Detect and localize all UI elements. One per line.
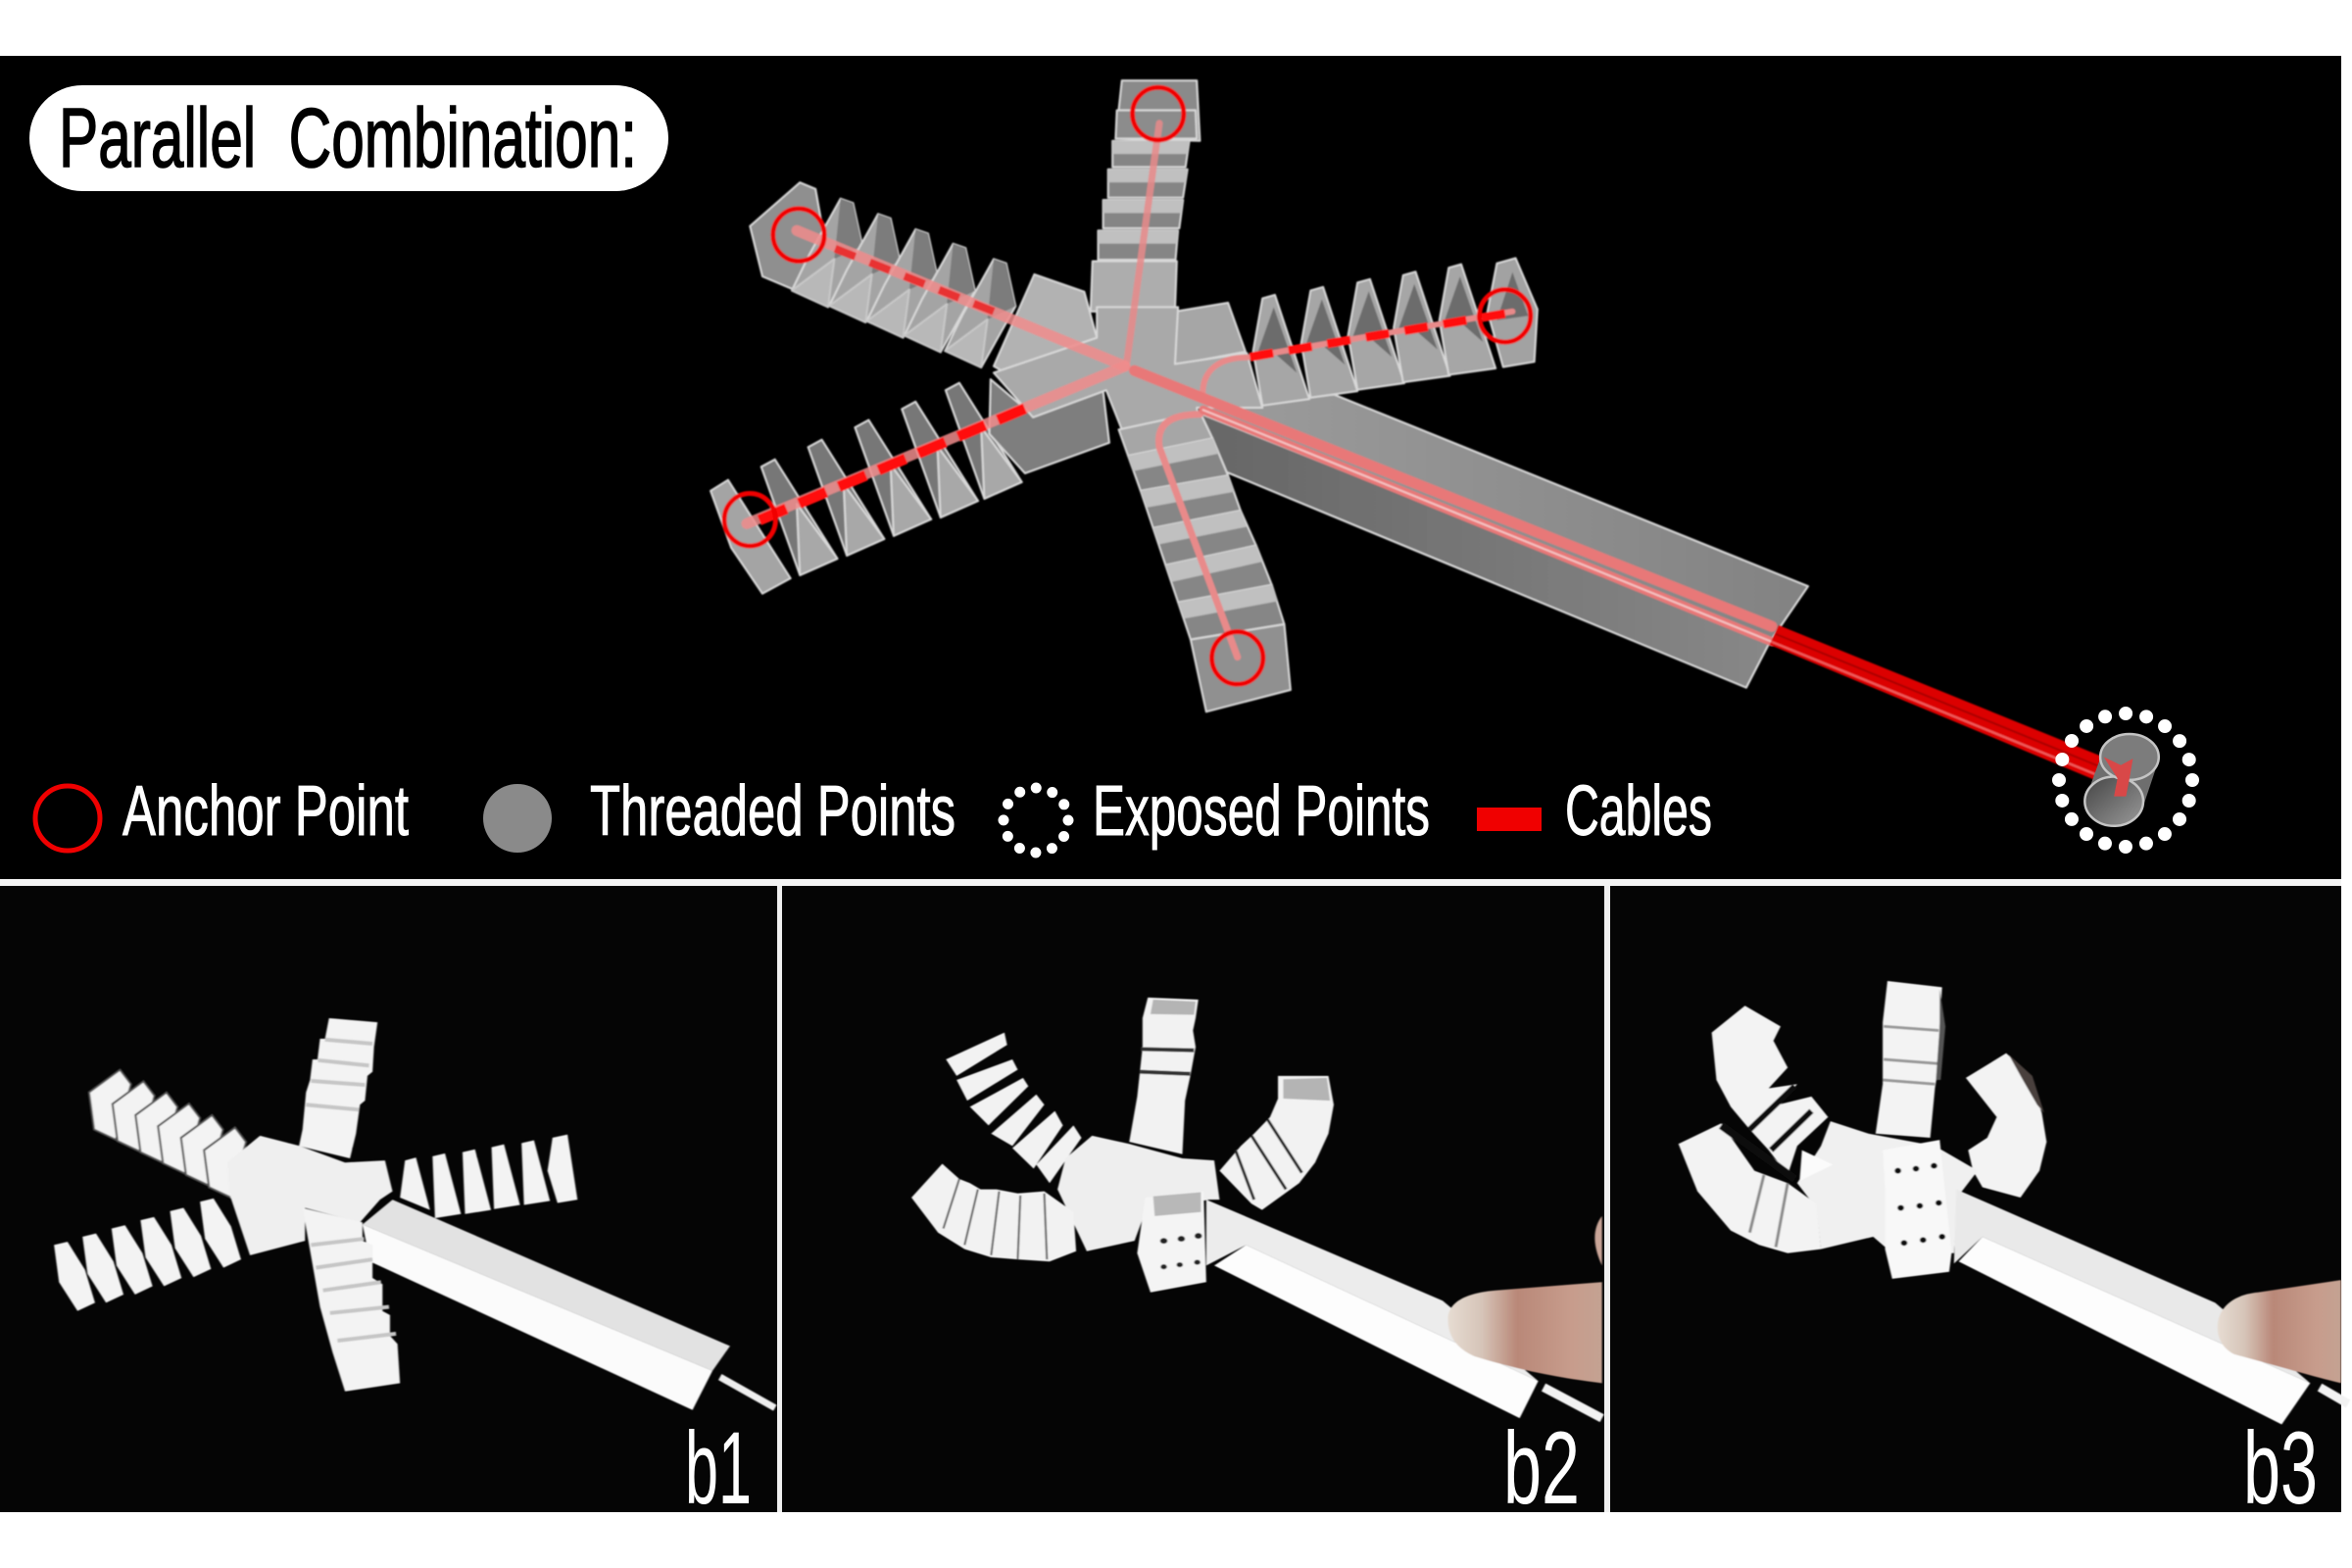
b2 hub [1057,1136,1219,1251]
b3 upper left arm [1712,1005,1828,1175]
b2 finger sliver [1594,1216,1602,1265]
horizontal panel divider [0,879,2341,886]
legend: cables [1477,772,1712,851]
legend: anchor point: Anchor Point [122,772,409,851]
hub: central body [990,274,1262,473]
legend: cables: Cables [1565,772,1712,851]
legend: threaded points [483,772,956,853]
exposed cables running to cylinder [1770,625,2102,780]
photo b1: flat structure [54,1018,775,1526]
arm: upper left with triangular fins [750,182,1015,368]
b3 hub [1797,1121,1978,1253]
title text: Parallel Combination: [59,92,637,185]
photo b3: fully bent structure with finger [1679,981,2348,1526]
b2 front arm with holes [1137,1192,1206,1293]
b2 top arm [1129,998,1199,1154]
b3 finger [2218,1280,2341,1383]
b3 handle [1954,1190,2348,1424]
b3 front arm with holes [1883,1140,1951,1279]
legend: threaded points: Threaded Points [590,772,956,851]
b1 lower left fins [54,1199,241,1311]
vertical divider b1 / b2 [777,886,782,1512]
b2 lower left arm [911,1163,1076,1261]
black background: photo panels [0,886,2341,1512]
arm: top stepped segments [1091,80,1200,312]
b2 right arm [1219,1076,1334,1210]
diagram: transparent 3D model with cables [710,80,1808,711]
label b1: b1 [685,1411,752,1526]
title pill [29,85,668,191]
b3 lower left arm [1679,1123,1821,1253]
anchor points on the model [724,87,1531,684]
handle bar [1197,395,1808,688]
legend [35,772,1712,853]
b1 upper left fins [89,1070,246,1198]
b1 right fins [400,1135,577,1218]
b1 top arm [299,1018,377,1158]
cylinder [2084,734,2159,826]
arm: right with triangular fins [1253,258,1538,406]
b2 upper left arm [946,1033,1082,1183]
b1 handle [363,1200,775,1410]
dotted ring [2059,713,2192,847]
b2 handle [1206,1200,1602,1418]
b2 finger [1448,1282,1602,1383]
arm: bottom stepped segments [1119,413,1291,711]
b1 hub [227,1136,393,1255]
label b2: b2 [1503,1411,1580,1526]
cables inside the model [747,123,1772,657]
arm: lower left with triangular fins [710,383,1022,594]
vertical divider b2 / b3 [1604,886,1610,1512]
photo b2: partly bent structure with finger [911,998,1602,1526]
legend: anchor point [35,772,409,851]
black background: top panel [0,56,2341,880]
legend: exposed points: Exposed Points [1093,772,1430,851]
b3 right arm [1966,1054,2046,1198]
b3 top arm [1876,981,1945,1138]
legend: exposed points [1004,772,1430,853]
b1 bottom arm [303,1208,400,1392]
exposed-point cylinder with dotted ring [2059,713,2192,847]
